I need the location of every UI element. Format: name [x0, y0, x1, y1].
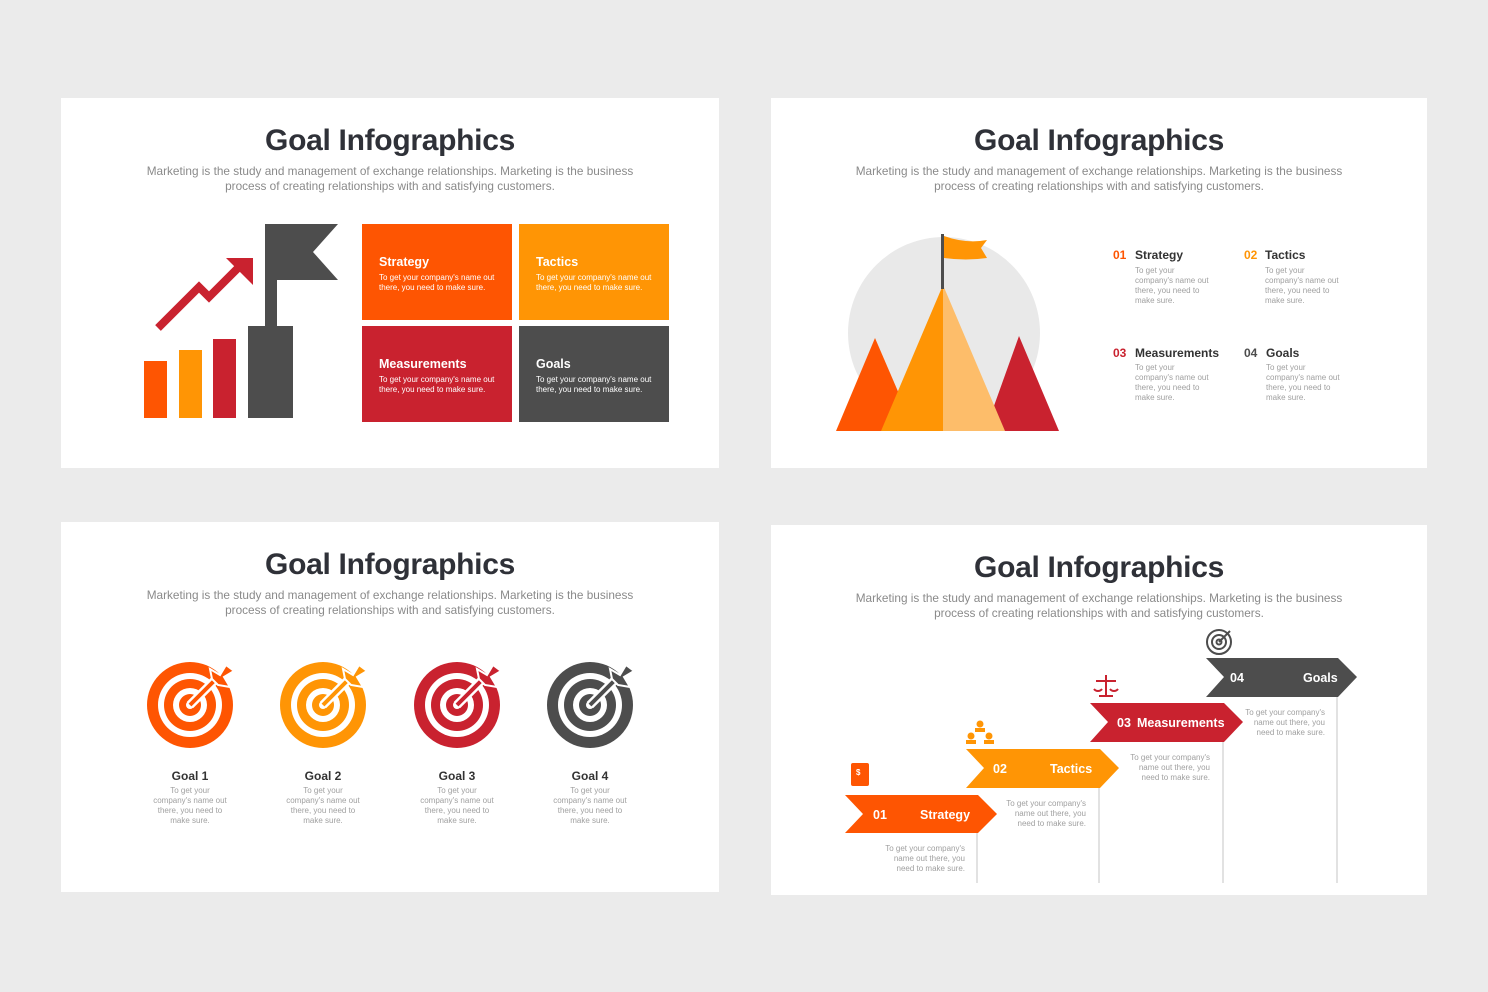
goal 2: [286, 769, 360, 825]
panel: top-right mountain: company's name out: [1265, 276, 1339, 285]
goal 2: company's name out: [286, 796, 360, 805]
subtitle: process of creating relationships with and satisfying customers.: [225, 179, 555, 193]
box: Tactics: Tactics: [536, 255, 578, 269]
subtitle: Marketing is the study and management of exchange relationships. Marketing is the business: [147, 164, 633, 178]
goal 3: [420, 769, 494, 825]
text: step 01: To get your company's: [885, 844, 965, 853]
panel: top-right mountain: make sure.: [1266, 393, 1306, 402]
box: Measurements: there, you need to make sure.: [379, 385, 485, 394]
list item 02: [1244, 248, 1339, 305]
box: Goals: Goals: [536, 357, 571, 371]
goal 1: To get your: [170, 786, 210, 795]
text: step 01: need to make sure.: [897, 864, 965, 873]
goal 1: Goal 1: [172, 769, 208, 783]
goal 4: To get your: [570, 786, 610, 795]
box: Strategy: there, you need to make sure.: [379, 283, 485, 292]
panel: top-right mountain: there, you need to: [1135, 286, 1200, 295]
box: Measurements: [362, 326, 512, 422]
panel: top-right mountain: company's name out: [1266, 373, 1340, 382]
goal 1: there, you need to: [158, 806, 222, 815]
text: step 02: need to make sure.: [1018, 819, 1086, 828]
text: step 03: name out there, you: [1139, 763, 1210, 772]
box: Strategy: To get your company's name out: [379, 273, 494, 282]
box: Goals: there, you need to make sure.: [536, 385, 642, 394]
list item 03: [1113, 346, 1219, 402]
illustration: mountain with flag: [836, 234, 1059, 431]
chart: step chevrons: 02: [993, 762, 1007, 776]
text: step 01: name out there, you: [894, 854, 965, 863]
goal 4: Goal 4: [572, 769, 608, 783]
box: Goals: To get your company's name out: [536, 375, 651, 384]
goal 3: there, you need to: [425, 806, 489, 815]
text: step 02: To get your company's: [1006, 799, 1086, 808]
panel: top-right mountain: Goals: [1266, 346, 1299, 360]
subtitle: process of creating relationships with and satisfying customers.: [934, 606, 1264, 620]
chart: step chevrons: $: [856, 768, 861, 777]
goal 4: there, you need to: [558, 806, 622, 815]
panel: top-right mountain: To get your: [1265, 266, 1305, 275]
goal 2: make sure.: [303, 816, 343, 825]
icons: [851, 763, 869, 786]
panel: top-right mountain: To get your: [1266, 363, 1306, 372]
goal 2: Goal 2: [305, 769, 341, 783]
box: Tactics: there, you need to make sure.: [536, 283, 642, 292]
goal 4: make sure.: [570, 816, 610, 825]
subtitle: [147, 588, 633, 617]
text: step 01: [885, 844, 965, 873]
panel: top-right mountain: make sure.: [1265, 296, 1305, 305]
goal 1: [153, 769, 227, 825]
panel: top-right mountain: there, you need to: [1265, 286, 1330, 295]
chart: step chevrons: Goals: [1303, 671, 1338, 685]
panel: top-left flag and boxes: [61, 98, 719, 468]
panel: top-right mountain: 02: [1244, 248, 1257, 262]
goal 3: make sure.: [437, 816, 477, 825]
panel: top-right mountain: 03: [1113, 346, 1126, 360]
panel: top-right mountain: To get your: [1135, 266, 1175, 275]
panel: top-right mountain: 04: [1244, 346, 1257, 360]
panel: top-right mountain: make sure.: [1135, 296, 1175, 305]
goal 3: company's name out: [420, 796, 494, 805]
heading: Goal Infographics: [974, 551, 1224, 584]
subtitle: Marketing is the study and management of exchange relationships. Marketing is the business: [147, 588, 633, 602]
subtitle: [147, 164, 633, 193]
subtitle: process of creating relationships with and satisfying customers.: [225, 603, 555, 617]
chart: step chevrons: [845, 629, 1357, 883]
panel: bottom-right steps: [771, 525, 1427, 895]
box: Tactics: To get your company's name out: [536, 273, 651, 282]
text: step 03: need to make sure.: [1142, 773, 1210, 782]
subtitle: Marketing is the study and management of exchange relationships. Marketing is the business: [856, 164, 1342, 178]
panel: bottom-left targets: [61, 522, 719, 892]
text: step 04: [1245, 708, 1325, 737]
panel: top-right mountain: there, you need to: [1135, 383, 1200, 392]
chart: bars arrow flag: [144, 224, 338, 418]
goal 3: To get your: [437, 786, 477, 795]
panel: top-right mountain: Tactics: [1265, 248, 1305, 262]
goal 1: company's name out: [153, 796, 227, 805]
subtitle: [856, 591, 1342, 620]
panel: top-right mountain: [771, 98, 1427, 468]
chart: step chevrons: Tactics: [1050, 762, 1092, 776]
goal 4: company's name out: [553, 796, 627, 805]
list item 01: [1113, 248, 1209, 305]
chart: step chevrons: Measurements: [1137, 716, 1225, 730]
panel: top-right mountain: there, you need to: [1266, 383, 1330, 392]
box: Measurements: To get your company's name out: [379, 375, 494, 384]
text: step 03: [1130, 753, 1210, 782]
heading: Goal Infographics: [265, 124, 515, 157]
text: step 03: To get your company's: [1130, 753, 1210, 762]
goal 2: there, you need to: [291, 806, 355, 815]
chart: step chevrons: 03: [1117, 716, 1131, 730]
panel: top-right mountain: make sure.: [1135, 393, 1175, 402]
text: step 02: [1006, 799, 1086, 828]
goal 1: make sure.: [170, 816, 210, 825]
text: step 02: name out there, you: [1015, 809, 1086, 818]
box: Goals: [519, 326, 669, 422]
panel: top-right mountain: 01: [1113, 248, 1126, 262]
goal 3: Goal 3: [439, 769, 475, 783]
chart: step chevrons: Strategy: [920, 808, 970, 822]
text: step 04: name out there, you: [1254, 718, 1325, 727]
chart: step chevrons: 04: [1230, 671, 1244, 685]
subtitle: [856, 164, 1342, 193]
goal 2: To get your: [303, 786, 343, 795]
text: step 04: need to make sure.: [1257, 728, 1325, 737]
heading: Goal Infographics: [265, 548, 515, 581]
text: step 04: To get your company's: [1245, 708, 1325, 717]
list item 04: [1244, 346, 1340, 402]
subtitle: process of creating relationships with and satisfying customers.: [934, 179, 1264, 193]
box: Strategy: [362, 224, 512, 320]
chart: step chevrons: 01: [873, 808, 887, 822]
panel: top-right mountain: company's name out: [1135, 276, 1209, 285]
icons: targets: [147, 662, 633, 748]
goal 4: [553, 769, 627, 825]
heading: Goal Infographics: [974, 124, 1224, 157]
panel: top-right mountain: To get your: [1135, 363, 1175, 372]
panel: top-right mountain: company's name out: [1135, 373, 1209, 382]
panel: top-right mountain: Measurements: [1135, 346, 1219, 360]
panel: top-right mountain: Strategy: [1135, 248, 1183, 262]
box: Strategy: Strategy: [379, 255, 429, 269]
box: Measurements: Measurements: [379, 357, 467, 371]
box: Tactics: [519, 224, 669, 320]
subtitle: Marketing is the study and management of exchange relationships. Marketing is the business: [856, 591, 1342, 605]
